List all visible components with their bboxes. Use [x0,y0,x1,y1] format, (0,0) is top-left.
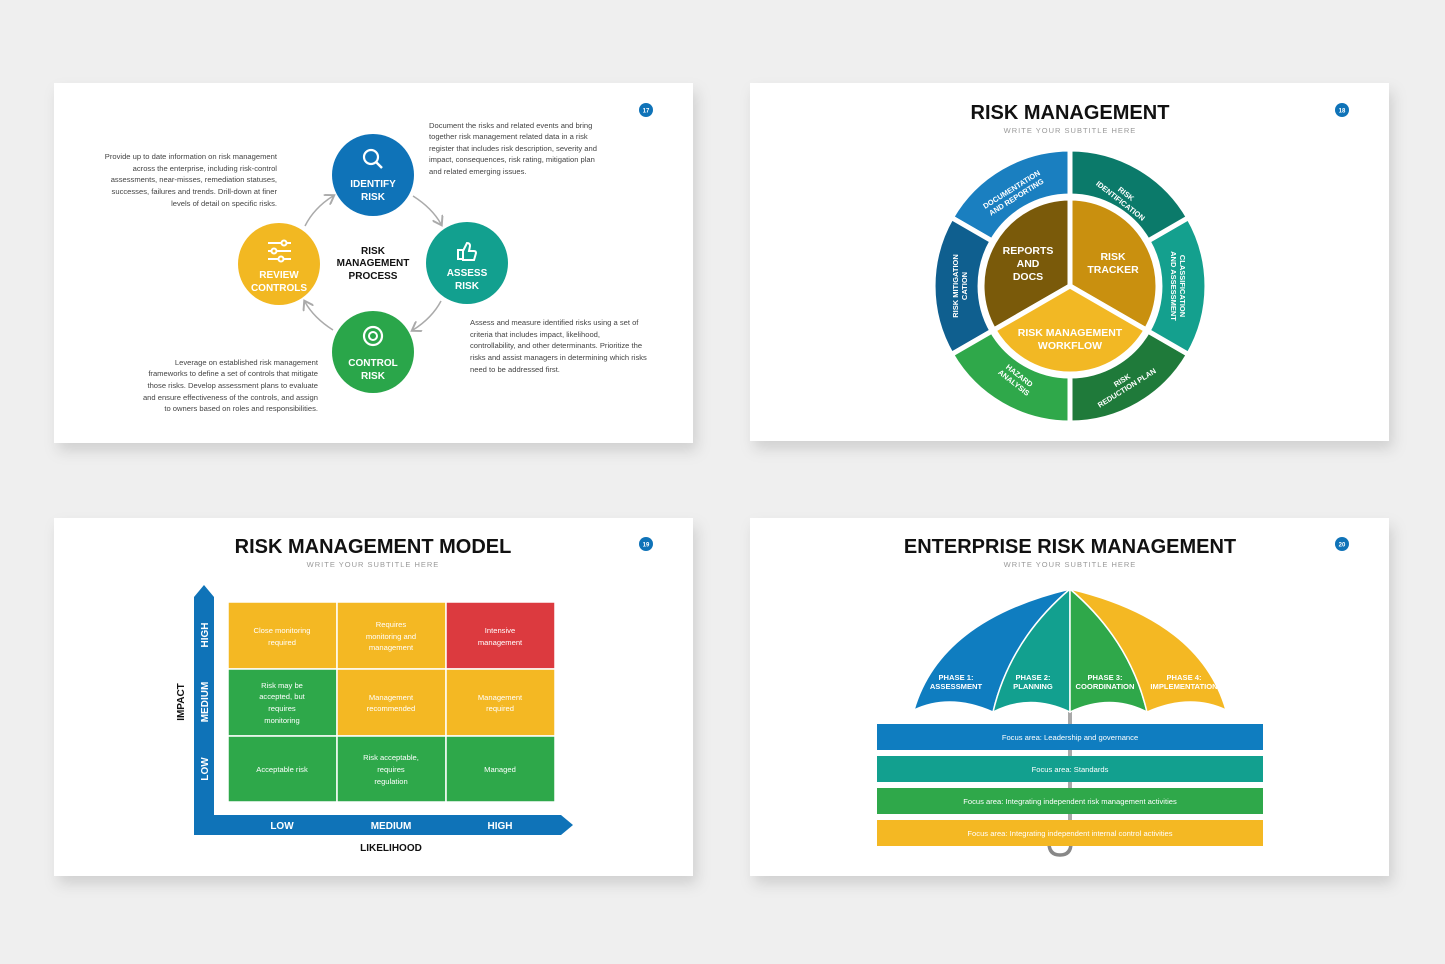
title: WRITE YOUR SUBTITLE HERE [1004,126,1136,135]
text: identify description: and related emerging issues. [429,167,527,176]
wheel labels: RISK MITIGATION [951,254,960,318]
wheel labels: TRACKER [1087,264,1139,276]
text: review description: across the enterprise, including risk-control [133,164,277,173]
umbrella pole [1049,700,1072,855]
matrix labels: Risk may be [261,681,303,690]
wheel labels: RISK MANAGEMENT [1018,327,1123,339]
matrix labels: monitoring and [366,632,416,641]
risk matrix [228,602,555,802]
focus area bars: Focus area: Standards [1032,765,1109,774]
text: assess description: controllability, and other determinants. Prioritize the [470,341,642,350]
umbrella canopy [914,589,1226,712]
axes [194,585,573,835]
title [904,536,1236,569]
matrix labels: Management [478,693,523,702]
focus area bars: Focus area: Leadership and governance [1002,733,1138,742]
text: control description: frameworks to define a set of controls that mitigate [148,369,318,378]
phase labels: COORDINATION [1076,682,1134,691]
matrix labels: requires [268,704,296,713]
matrix labels: accepted, but [259,692,306,701]
text: assess description: risks and assist managers in determining which risks [470,353,647,362]
text: assess description: need to be addressed first. [470,365,560,374]
matrix labels: management [478,638,523,647]
center label: RISK [361,246,386,257]
phase labels: PLANNING [1013,682,1053,691]
text: assess description [470,318,647,374]
text: identify description: together risk management related data in a risk [429,132,588,141]
axes: LOW [270,821,294,832]
text: identify description: Document the risks and related events and bring [429,121,592,130]
matrix labels: Intensive [485,626,515,635]
matrix labels: monitoring [264,716,300,725]
text: identify description: impact, consequences, risk rating, mitigation plan [429,155,595,164]
text: control description: Leverage on established risk management [175,358,319,367]
panel: enterprise risk management [750,518,1389,876]
axis titles [176,683,422,854]
wheel labels: DOCS [1013,271,1043,283]
center label [337,246,409,282]
phase labels: PHASE 1: [938,673,974,682]
matrix labels: Close monitoring [254,626,310,635]
focus area bars: Focus area: Integrating independent internal control activities [967,829,1173,838]
wheel labels: IDENTIFICATION [1094,179,1147,223]
text: control description: those risks. Develop assessment plans to evaluate [147,381,318,390]
text: assess description: Assess and measure identified risks using a set of [470,318,639,327]
wheel chart [933,149,1207,423]
wheel labels: REDUCTION PLAN [1096,366,1158,410]
title [235,536,511,569]
matrix labels: Risk acceptable, [363,753,419,762]
page number 20 [1335,537,1349,551]
panel: risk management model [54,518,693,876]
circle: review controls [238,223,320,305]
center label: MANAGEMENT [337,258,409,269]
axes: LOW [200,757,211,781]
circle: control risk: CONTROL [348,358,398,369]
text: identify description [429,121,597,176]
text: control description [143,358,319,413]
cycle arrows [305,196,441,330]
circle: control risk: RISK [361,371,386,382]
text: review description: assessments, near-misses, remediation statuses, [111,175,277,184]
matrix labels: requires [377,765,405,774]
text: control description: and ensure effectiveness of the controls, and assign [143,393,318,402]
phase labels [930,673,1218,691]
title: RISK MANAGEMENT MODEL [235,536,511,558]
focus area bars [877,724,1263,846]
circle: identify risk: IDENTIFY [350,179,396,190]
text: assess description: criteria that includes impact, likelihood, [470,330,600,339]
text: review description: Provide up to date information on risk management [105,152,278,161]
phase labels: PHASE 3: [1087,673,1123,682]
axes: MEDIUM [200,682,211,722]
matrix labels: regulation [374,777,408,786]
axes: MEDIUM [371,821,411,832]
circle: control risk [332,311,414,393]
panel: risk management process [54,83,693,443]
wheel labels: HAZARD [1004,362,1035,389]
text: review description: levels of detail on specific risks. [171,199,277,208]
page number 18: 18 [1339,108,1346,114]
phase labels: ASSESSMENT [930,682,983,691]
focus area bars: Focus area: Integrating independent risk management activities [963,797,1177,806]
wheel labels: RISK [1112,371,1133,389]
matrix labels: Requires [376,620,406,629]
wheel labels: CLASSIFICATION [1178,255,1187,317]
center label: PROCESS [349,271,398,282]
circle: assess risk: RISK [455,281,480,292]
axes: HIGH [200,622,211,648]
circle: review controls: CONTROLS [251,283,307,294]
wheel labels: RISK [1116,185,1136,203]
wheel labels: AND ASSESSMENT [1169,251,1178,321]
text: identify description: register that includes risk description, severity and [429,144,597,153]
text: review description: successes, failures and trends. Drill-down at finer [112,187,277,196]
phase labels: IMPLEMENTATION [1150,682,1218,691]
matrix labels [254,620,523,786]
matrix labels: recommended [367,704,415,713]
title [971,102,1169,135]
matrix labels: management [369,643,414,652]
page number 20: 20 [1339,542,1346,548]
wheel labels: REPORTS [1003,245,1053,257]
circle: assess risk: ASSESS [447,268,488,279]
wheel labels: RISK [1100,251,1126,263]
circle: identify risk [332,134,414,216]
text: control description: to owners based on roles and responsibilities. [164,404,318,413]
axis titles: IMPACT [176,683,187,721]
page number 18 [1335,103,1349,117]
circle: review controls: REVIEW [259,270,299,281]
wheel labels: ANALYSIS [996,368,1031,398]
title: ENTERPRISE RISK MANAGEMENT [904,536,1236,558]
matrix labels: Acceptable risk [256,765,308,774]
wheel labels [951,168,1187,410]
page number 19: 19 [643,542,650,548]
matrix labels: required [486,704,514,713]
axes: HIGH [488,821,512,832]
title: WRITE YOUR SUBTITLE HERE [307,560,439,569]
wheel labels: CATION [960,272,969,300]
wheel labels: AND REPORTING [987,177,1046,218]
matrix labels: required [268,638,296,647]
matrix labels: Management [369,693,414,702]
matrix labels: Managed [484,765,516,774]
title: RISK MANAGEMENT [971,102,1169,124]
phase labels: PHASE 2: [1015,673,1051,682]
axis titles: LIKELIHOOD [360,843,422,854]
wheel labels: WORKFLOW [1038,340,1102,352]
page number 17: 17 [643,108,650,114]
wheel labels: DOCUMENTATION [981,168,1042,211]
wheel labels: AND [1017,258,1040,270]
text: review description [105,152,278,208]
title: WRITE YOUR SUBTITLE HERE [1004,560,1136,569]
page number 17 [639,103,653,117]
phase labels: PHASE 4: [1166,673,1202,682]
panel: risk management wheel [750,83,1389,441]
circle: identify risk: RISK [361,192,386,203]
circle: assess risk [426,222,508,304]
page number 19 [639,537,653,551]
